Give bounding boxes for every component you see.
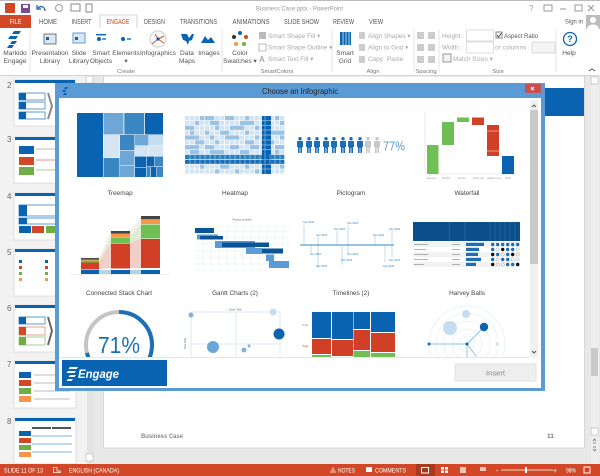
size controls: Match Sizes ▾: [453, 56, 493, 63]
ribbon button: Markido Engage: Engage: [4, 58, 27, 65]
ribbon tabs: TRANSITIONS: [180, 19, 217, 26]
gallery: [70, 111, 520, 382]
size controls: [442, 30, 555, 63]
view buttons: [416, 464, 486, 476]
tab: file: [0, 15, 31, 28]
zoom slider: -: [496, 468, 499, 475]
thumbnail: slide 6: 6: [7, 304, 12, 313]
ribbon button: Presentation Library: [31, 34, 69, 65]
ribbon button: Smart Grid: Grid: [339, 58, 352, 65]
insert button: [455, 364, 536, 381]
gantt chart: [195, 218, 290, 270]
radar bubble chart: [428, 306, 506, 357]
ribbon button: Markido Engage: Markido: [3, 50, 27, 57]
blue figures: [297, 137, 363, 153]
waterfall chart: Product: [442, 177, 451, 180]
help button: [562, 32, 576, 57]
label: connected stack chart: Connected Stack Chart: [86, 290, 152, 297]
pictogram: [297, 137, 405, 154]
size controls: Width :: [442, 44, 462, 52]
thumbnail: slide 8: 8: [7, 417, 12, 426]
ribbon button: Presentation Library: Presentation: [31, 50, 69, 57]
bubble chart: [183, 308, 284, 357]
ribbon tabs: ANIMATIONS: [232, 19, 270, 26]
dialog logo: [62, 87, 68, 95]
ribbon button: Color Swatches: Color: [232, 50, 249, 57]
ribbon tabs: VIEW: [369, 19, 383, 26]
insert button: Insert: [486, 368, 506, 378]
heatmap: [185, 116, 285, 174]
dialog: choose an infographic: [55, 83, 545, 391]
timelines: Nov 2015: [310, 252, 322, 256]
ribbon button: Presentation Library: Library: [40, 58, 61, 65]
marimekko chart: Total: [302, 344, 308, 348]
thumbnail: slide 6: [7, 304, 55, 352]
label: heatmap: Heatmap: [222, 190, 248, 197]
ribbon group labels: SmartColors: [261, 69, 293, 75]
waterfall chart: Fixed cost: [473, 177, 484, 180]
smart shape commands: Smart Text Fill ▾: [268, 56, 313, 63]
window title: Business Case.pptx - PowerPoint: [256, 6, 343, 12]
ribbon button: Slide Library: Slide: [72, 50, 87, 57]
ribbon button: Images: [198, 36, 221, 57]
bubble chart: Chart Title: [229, 308, 242, 312]
ribbon button: Data Maps: Data: [180, 50, 194, 57]
align commands: Copy: [368, 56, 384, 63]
thumbnail: slide 3: [7, 136, 55, 184]
thumbnail: slide 4: 4: [7, 192, 12, 201]
window controls: [529, 4, 594, 13]
sign in and avatar: [565, 15, 600, 29]
ribbon button: Images: Images: [198, 50, 221, 57]
slide canvas: [104, 76, 584, 448]
dialog footer divider: [59, 357, 530, 358]
ribbon tabs: [39, 19, 383, 26]
sign in and avatar: Sign in: [565, 18, 583, 26]
label: harvey balls: Harvey Balls: [449, 290, 485, 297]
align commands: Align Shapes ▾: [368, 33, 411, 40]
size controls: or columns :: [495, 44, 530, 52]
zoom slider: [496, 467, 590, 475]
dialog close button: [525, 84, 541, 93]
slide count: SLIDE 11 OF 13: [4, 468, 43, 474]
thumbnail: slide 2: [7, 80, 76, 126]
ribbon group labels: Size: [492, 69, 504, 75]
ribbon button: Smart Grid: [336, 32, 354, 65]
thumbnail: slide 7: 7: [7, 360, 12, 369]
smart shape commands: [259, 32, 332, 64]
ribbon panel: [0, 0, 600, 76]
timelines: Nov 2015: [347, 221, 359, 225]
align commands: Align to Grid ▾: [368, 44, 408, 52]
marimekko chart: Total: [302, 323, 308, 327]
timelines: Nov 2015: [316, 233, 328, 237]
timelines: Nov 2015: [389, 258, 401, 262]
label: waterfall: Waterfall: [455, 190, 479, 197]
treemap: [77, 113, 163, 177]
engage logo: [62, 360, 167, 386]
ribbon tabs: INSERT: [72, 19, 92, 26]
align commands: Paste: [387, 56, 404, 63]
timelines: Nov 2015: [303, 220, 315, 224]
ribbon tabs: SLIDE SHOW: [284, 19, 319, 26]
ribbon button: Elements: [112, 37, 140, 65]
gauge: 71 percent: [84, 310, 154, 357]
slide footer title: Business Case: [141, 433, 183, 440]
harvey balls table: [413, 222, 520, 267]
size controls: Aspect Ratio: [504, 33, 538, 40]
connecting bands: [99, 270, 141, 274]
comments: [366, 467, 406, 474]
timelines: Nov 2015: [316, 264, 328, 268]
grey figures: [365, 137, 380, 153]
engage logo: Engage: [78, 367, 119, 381]
thumbnail panel: [0, 76, 87, 464]
timelines: Nov 2015: [389, 227, 401, 231]
smart shape commands: Smart Shape Fill ▾: [268, 33, 320, 40]
ribbon tabs: HOME: [39, 19, 57, 26]
smart shape commands: Smart Shape Outline ▾: [268, 44, 332, 52]
gantt chart: Project timeline: [232, 218, 252, 222]
waterfall chart: Service: [458, 177, 467, 180]
waterfall chart: Revenue: [427, 177, 437, 180]
slide header bar: [545, 88, 584, 116]
window controls: ?: [529, 4, 534, 13]
ribbon tabs: DESIGN: [144, 19, 165, 26]
label: timelines: Timelines (2): [333, 290, 369, 297]
timelines: Nov 2015: [383, 264, 395, 268]
notes: [330, 468, 355, 474]
ribbon button: Slide Library: [69, 33, 90, 65]
gauge: 71 percent: 71%: [98, 332, 140, 358]
bubble chart: Axis Title: [183, 337, 187, 349]
slide number: 11: [547, 433, 554, 440]
thumbnail: slide 5: 5: [7, 248, 12, 257]
tab: file: FILE: [10, 19, 22, 26]
ribbon group labels: Spacing: [415, 69, 437, 75]
notes: NOTES: [338, 468, 355, 474]
comments: COMMENTS: [375, 468, 406, 474]
thumbnail: slide 2: 2: [7, 81, 12, 90]
label: treemap: Treemap: [107, 190, 133, 197]
thumbnail: slide 7: [7, 360, 76, 408]
bars: [81, 258, 99, 260]
help button: Help: [562, 50, 576, 57]
thumbnail: slide 5: [7, 248, 55, 296]
waterfall chart: Profit: [505, 177, 511, 180]
size controls: Height :: [442, 33, 464, 40]
ribbon button: Color Swatches: Swatches ▾: [223, 58, 258, 65]
thumbnail: slide 4: [7, 192, 55, 240]
quick access toolbar: [5, 3, 92, 13]
align commands: [359, 32, 411, 63]
spacing icons: [417, 32, 435, 63]
smart shape commands: A: [259, 55, 265, 64]
ribbon tabs: REVIEW: [333, 19, 354, 26]
ribbon button: Elements: Elements: [112, 50, 140, 57]
label: gantt charts: Gantt Charts (2): [212, 290, 258, 297]
tab: engage: ENGAGE: [106, 19, 130, 26]
thumbnail scrollbar: [86, 76, 94, 464]
ribbon button: Elements: ▾: [124, 58, 128, 65]
dialog scrollbar: [530, 100, 538, 357]
language: ENGLISH (CANADA): [69, 468, 119, 474]
icon: spelling book: [54, 468, 60, 472]
waterfall chart: Variable cost: [487, 177, 501, 180]
ribbon group labels: Create: [117, 69, 136, 75]
ribbon button: Data Maps: Maps: [179, 58, 196, 65]
ribbon button: Color Swatches: [223, 31, 258, 65]
ribbon button: Infographics: Infographics: [140, 50, 177, 57]
ribbon button: Infographics: [140, 31, 177, 57]
zoom slider: 98%: [566, 468, 576, 474]
status bar: [0, 464, 600, 476]
thumbnail: slide 8: [7, 417, 76, 464]
waterfall chart: [425, 111, 517, 180]
ribbon button: Smart Objects: [90, 34, 113, 65]
ribbon button: Slide Library: Library: [69, 58, 90, 65]
timelines: Nov 2015: [341, 258, 353, 262]
tab: engage: [100, 15, 137, 28]
ribbon group labels: [117, 69, 504, 75]
ribbon button: Smart Grid: Smart: [336, 50, 354, 57]
timelines: Nov 2015: [334, 227, 346, 231]
timelines: Nov 2015: [347, 252, 359, 256]
thumbnail: slide 3: 3: [7, 135, 12, 144]
timelines: Nov 2015: [373, 233, 385, 237]
label: pictogram: Pictogram: [337, 190, 365, 197]
ribbon button: Data Maps: [179, 34, 196, 65]
timelines: [300, 220, 401, 268]
zoom slider: +: [553, 468, 557, 475]
ribbon button: Markido Engage: [3, 31, 27, 65]
main scrollbar: [591, 76, 599, 464]
ribbon button: Smart Objects: Objects: [90, 58, 113, 65]
pictogram value: 77%: [383, 138, 405, 154]
dialog title: Choose an Infographic: [262, 87, 338, 96]
connected stack chart: [70, 216, 170, 274]
marimekko chart: [302, 312, 395, 358]
ribbon button: Smart Objects: Smart: [92, 50, 110, 57]
help button: ?: [567, 34, 573, 44]
ribbon group labels: Align: [366, 69, 380, 75]
